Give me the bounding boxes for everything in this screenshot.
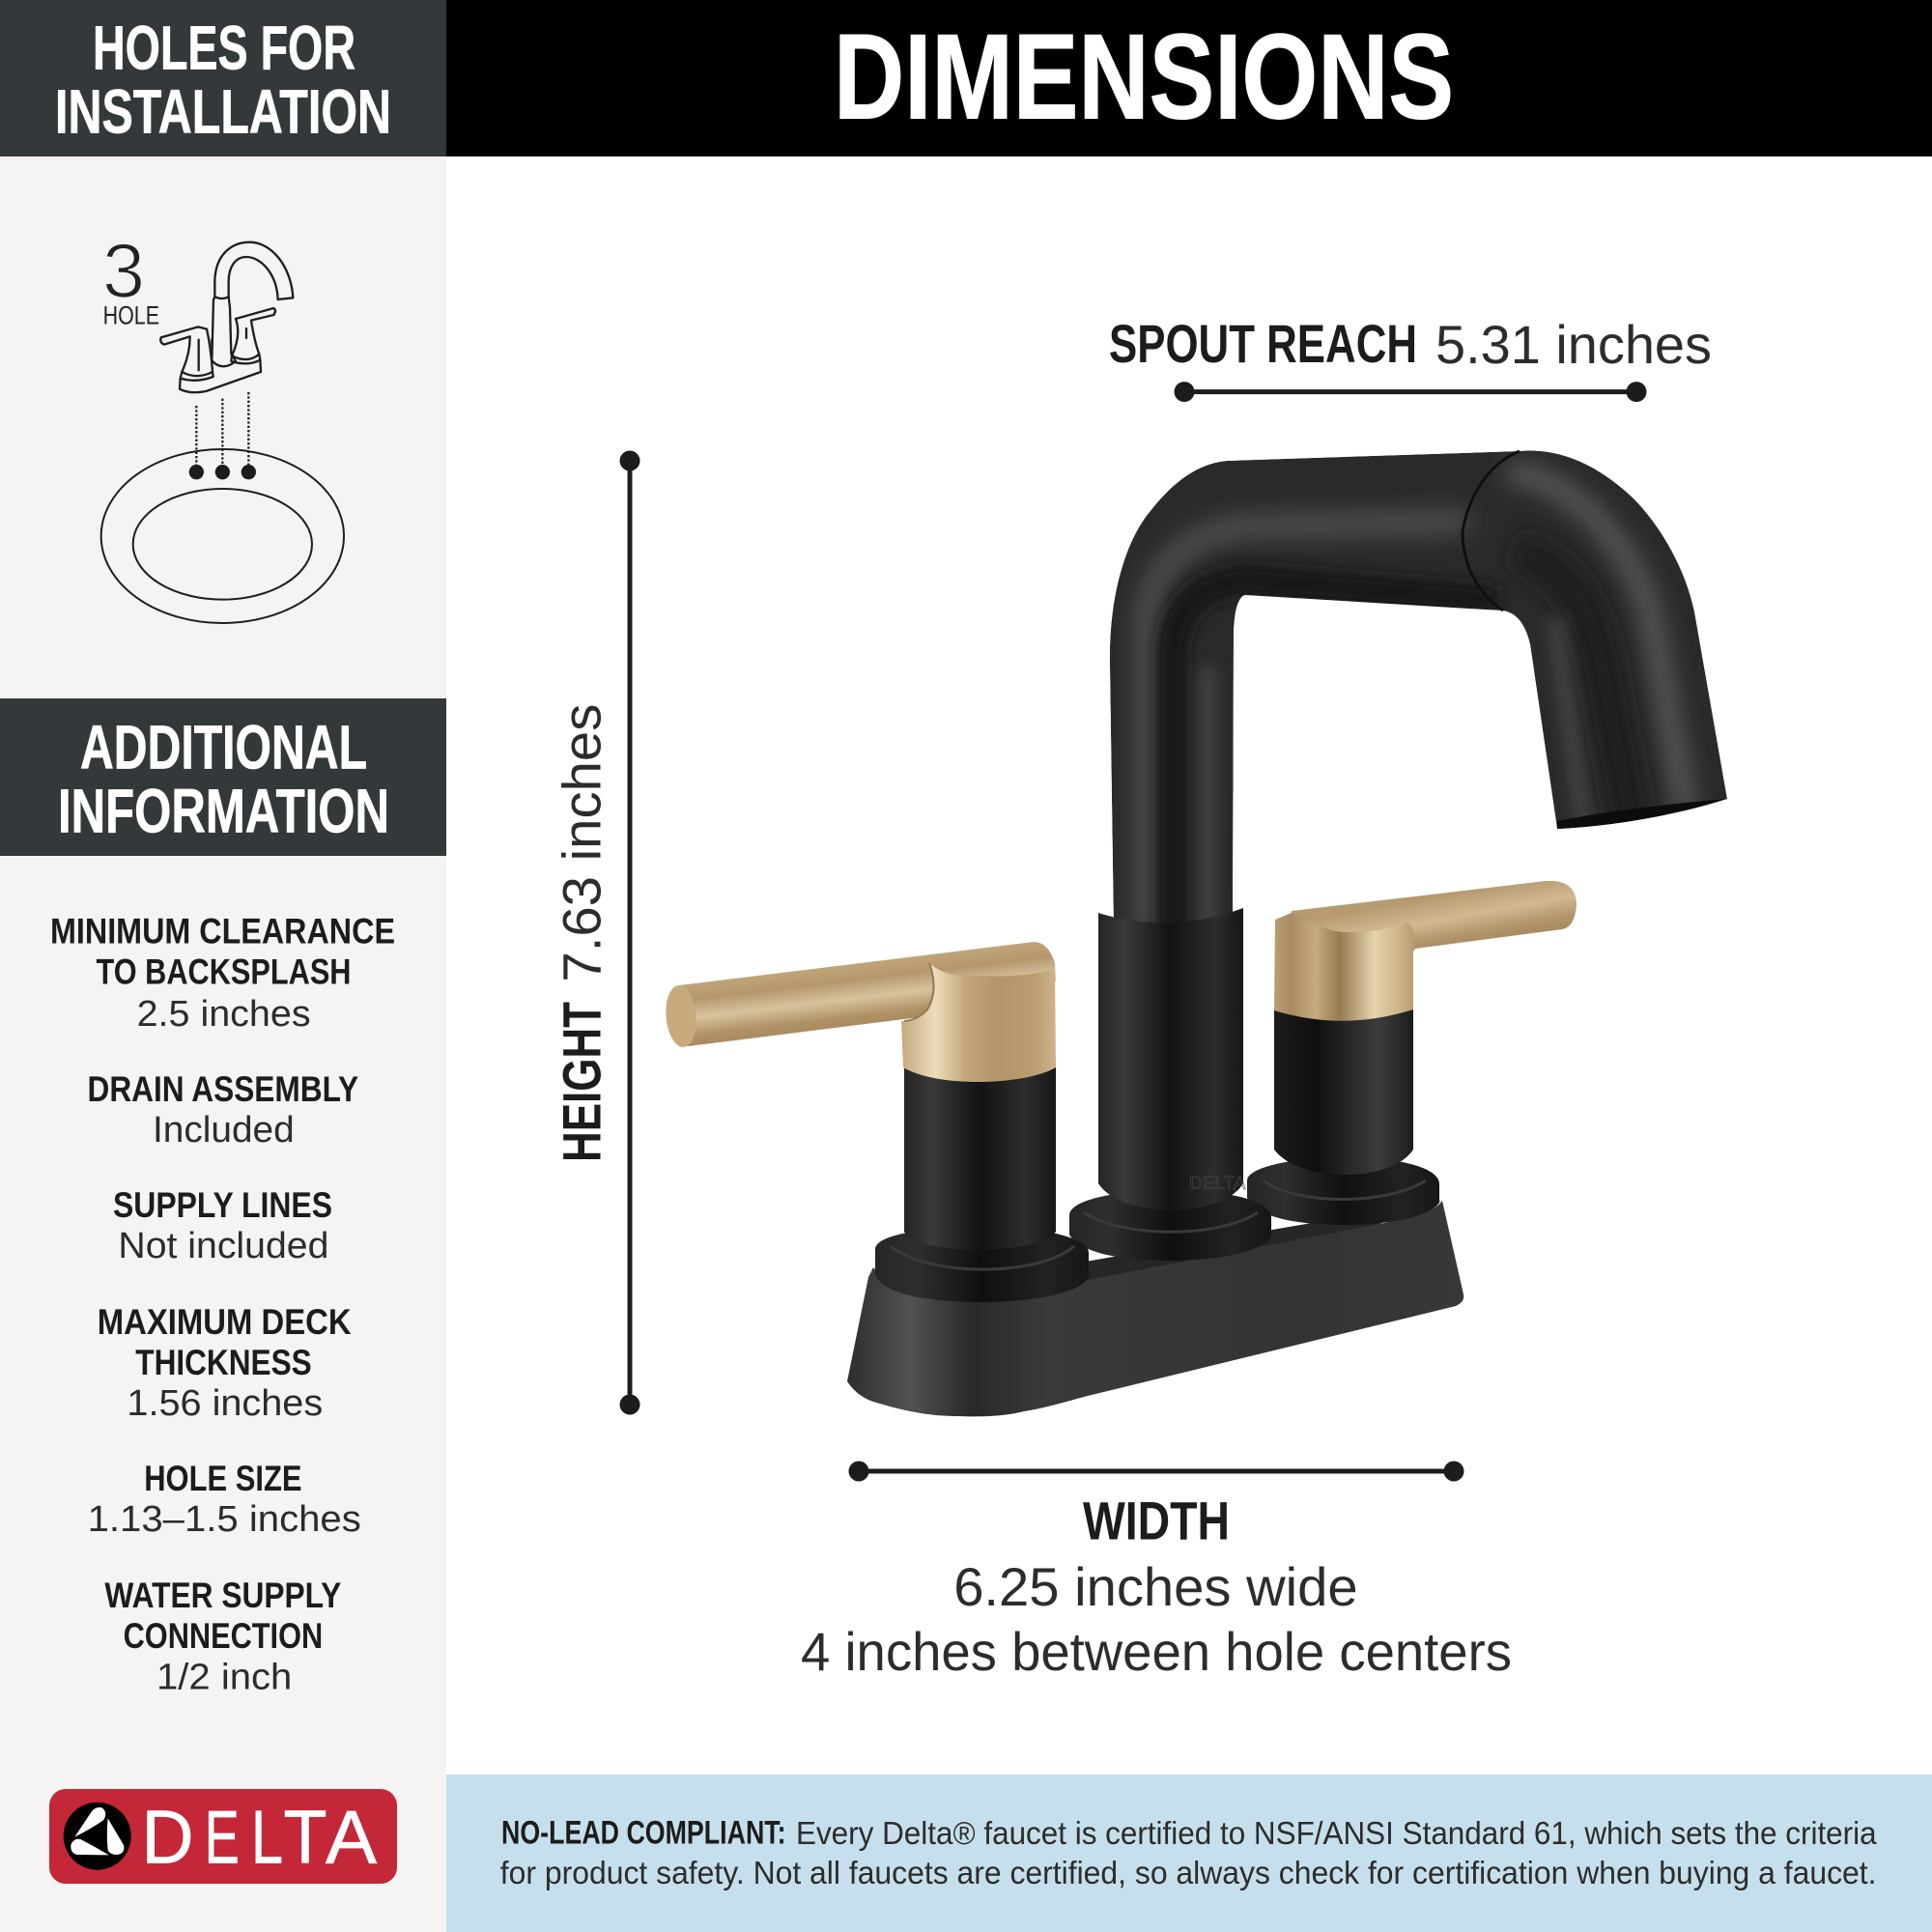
- header: holes for installation: [0, 0, 446, 156]
- spec: water supply connection: 1/2 inch: [156, 1658, 292, 1698]
- spec: maximum deck thickness: 1.56 inches: [127, 1383, 323, 1424]
- spec: minimum clearance: 2.5 inches: [137, 994, 311, 1035]
- faucet center body: DELTA: [1189, 1174, 1246, 1194]
- dimension: spout reach: [1109, 313, 1712, 402]
- faucet deck plate: [847, 1201, 1463, 1416]
- faucet center escutcheon: [1069, 1190, 1271, 1261]
- spec: minimum clearance: TO BACKSPLASH: [97, 952, 352, 991]
- no-lead compliance note: Every Delta® faucet is certified to NSF/ANSI Standard 61, which sets the criteria: [796, 1815, 1877, 1851]
- spec: water supply connection: WATER SUPPLY: [104, 1576, 342, 1615]
- faucet left handle body: [904, 1063, 1056, 1250]
- header: additional information: ADDITIONAL: [80, 713, 367, 782]
- spec: drain assembly: DRAIN ASSEMBLY: [87, 1069, 358, 1109]
- faucet left escutcheon: [875, 1227, 1089, 1302]
- title: dimensions: [446, 0, 1932, 156]
- faucet illustration: [664, 450, 1727, 1416]
- no-lead compliance note: NO-LEAD COMPLIANT:: [501, 1814, 786, 1851]
- dimension: width: [801, 1461, 1512, 1682]
- spec: hole size: [88, 1459, 361, 1540]
- spec: minimum clearance: [50, 912, 395, 1035]
- logo: delta: [49, 1789, 397, 1884]
- spec: water supply connection: [104, 1576, 342, 1698]
- header: additional information: [0, 698, 446, 856]
- icon: 3 hole sink diagram: [101, 227, 344, 623]
- faucet right escutcheon: [1247, 1157, 1439, 1225]
- faucet left gold cap: [901, 963, 1056, 1082]
- logo: delta: T: [284, 1795, 327, 1880]
- spec: drain assembly: Included: [153, 1110, 295, 1151]
- faucet right gold cap: [1274, 913, 1413, 1021]
- header: additional information: INFORMATION: [58, 777, 389, 846]
- faucet spout seam: [1463, 451, 1520, 611]
- no-lead compliance note: for product safety. Not all faucets are certified, so always check for certification when buying a faucet.: [500, 1855, 1876, 1890]
- logo: delta: A: [326, 1795, 377, 1880]
- dimension: width: 6.25 inches wide: [953, 1556, 1358, 1617]
- faucet spout outlet: [1557, 799, 1727, 829]
- spec: water supply connection: CONNECTION: [124, 1616, 323, 1656]
- dimension: spout reach: SPOUT REACH: [1109, 313, 1417, 374]
- spec: supply lines: SUPPLY LINES: [113, 1185, 332, 1225]
- spec: supply lines: [113, 1185, 332, 1266]
- spec: drain assembly: [87, 1069, 358, 1151]
- header: holes for installation: INSTALLATION: [55, 77, 391, 147]
- spec: hole size: HOLE SIZE: [144, 1459, 301, 1498]
- spec: maximum deck thickness: [98, 1302, 352, 1424]
- spec: maximum deck thickness: MAXIMUM DECK: [98, 1302, 352, 1342]
- icon: 3 hole sink diagram: HOLE: [103, 301, 159, 330]
- faucet right handle body: [1274, 1009, 1413, 1175]
- dimension: height: 7.63 inches: [551, 704, 612, 982]
- dimension: width: WIDTH: [1083, 1490, 1230, 1550]
- no-lead compliance note: [500, 1814, 1877, 1890]
- logo: delta: L: [251, 1795, 283, 1880]
- dimension: height: HEIGHT: [551, 1002, 612, 1162]
- title: dimensions: DIMENSIONS: [834, 10, 1454, 145]
- faucet left lever: [664, 942, 1056, 1048]
- spec: maximum deck thickness: THICKNESS: [135, 1343, 312, 1382]
- sidebar background: [0, 0, 446, 1932]
- dimension: width: 4 inches between hole centers: [801, 1621, 1512, 1682]
- spec: hole size: 1.13–1.5 inches: [88, 1499, 361, 1540]
- logo: delta: E: [205, 1795, 240, 1880]
- faucet spout: [1110, 450, 1727, 937]
- logo: delta: D: [141, 1795, 193, 1880]
- dimension: spout reach: 5.31 inches: [1435, 314, 1712, 375]
- spec: supply lines: Not included: [118, 1226, 328, 1266]
- dimension: height: [551, 450, 639, 1414]
- spec: minimum clearance: MINIMUM CLEARANCE: [50, 912, 395, 951]
- footer band background: [446, 1775, 1932, 1932]
- icon: 3 hole sink diagram: 3: [102, 227, 145, 313]
- faucet right lever: [1285, 881, 1577, 952]
- header: holes for installation: HOLES FOR: [93, 14, 355, 83]
- faucet center body: [1098, 908, 1246, 1210]
